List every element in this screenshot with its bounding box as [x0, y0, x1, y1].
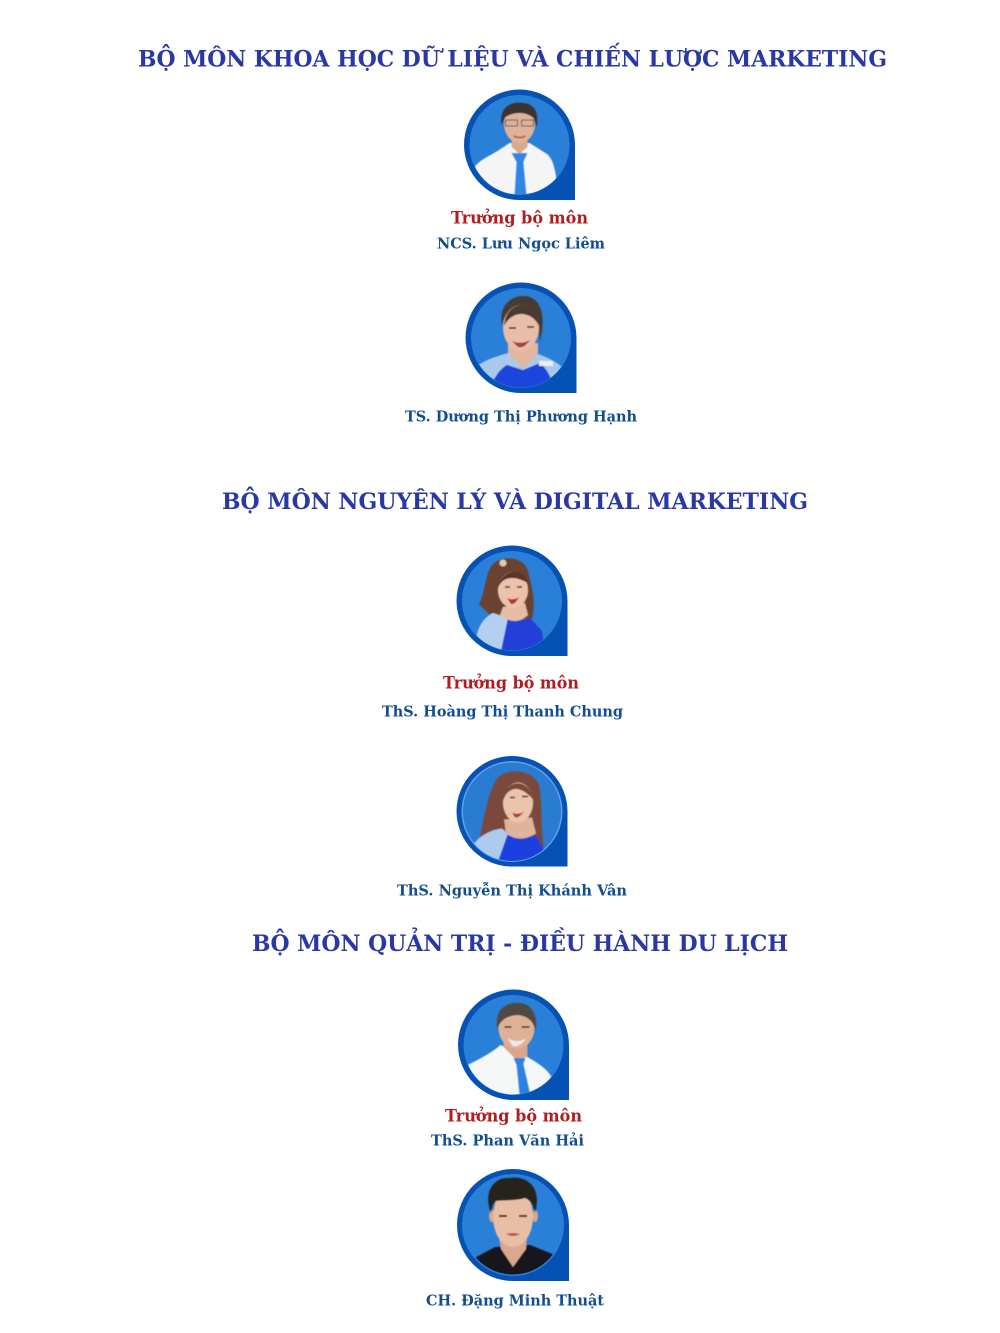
role label: head of department: Trưởng bộ môn	[443, 674, 579, 692]
role label: head of department: Trưởng bộ môn	[445, 1106, 582, 1126]
portrait badge: Lưu Ngọc Liêm	[464, 90, 575, 200]
heading: data science and marketing strategy department: BỘ MÔN KHOA HỌC DỮ LIỆU VÀ CHIẾN LƯỢC MARKETING	[138, 42, 887, 72]
portrait badge: Phan Văn Hải	[458, 990, 569, 1100]
heading: principles and digital marketing department: BỘ MÔN NGUYÊN LÝ VÀ DIGITAL MARKETING	[222, 487, 808, 515]
name: Dương Thị Phương Hạnh: TS. Dương Thị Phương Hạnh	[405, 408, 637, 426]
portrait badge: Đặng Minh Thuật	[457, 1169, 569, 1281]
portrait badge: Hoàng Thị Thanh Chung	[456, 546, 568, 656]
heading: tourism management department: BỘ MÔN QUẢN TRỊ - ĐIỀU HÀNH DU LỊCH	[252, 927, 788, 957]
portrait badge: Nguyễn Thị Khánh Vân	[456, 756, 568, 866]
name: Hoàng Thị Thanh Chung: ThS. Hoàng Thị Thanh Chung	[382, 702, 623, 720]
name: Nguyễn Thị Khánh Vân: ThS. Nguyễn Thị Khánh Vân	[397, 882, 627, 900]
portrait badge: Dương Thị Phương Hạnh	[466, 282, 576, 393]
name: Phan Văn Hải: ThS. Phan Văn Hải	[431, 1132, 584, 1150]
name: Lưu Ngọc Liêm: NCS. Lưu Ngọc Liêm	[437, 234, 605, 252]
name: Đặng Minh Thuật: CH. Đặng Minh Thuật	[426, 1292, 604, 1310]
role label: head of department: Trưởng bộ môn	[451, 208, 588, 228]
